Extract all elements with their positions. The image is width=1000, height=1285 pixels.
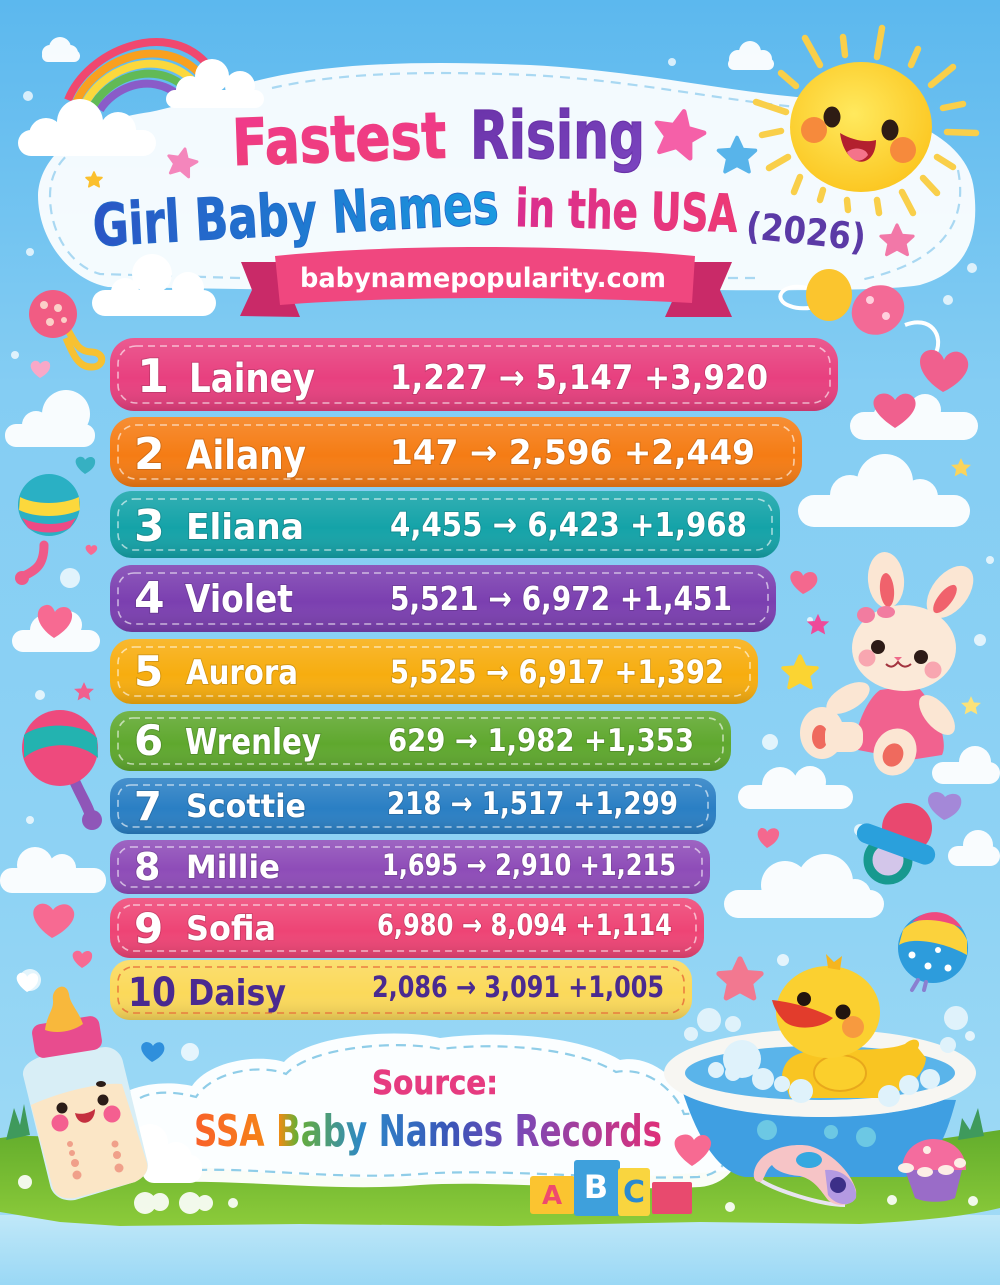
bubbles [684, 1006, 968, 1107]
icon: bunny [800, 551, 983, 783]
row 9: 6,980 → 8,094 +1,114 [377, 908, 672, 942]
icon: cupcake [898, 1139, 966, 1202]
cloud: right mid [798, 454, 970, 527]
row 7: 218 → 1,517 +1,299 [387, 786, 678, 822]
grass [0, 1130, 1000, 1226]
title [91, 97, 868, 260]
duck cheek [842, 1016, 864, 1038]
icon: bathtub with duck [664, 954, 976, 1177]
cloud: rainbow right [166, 59, 264, 108]
icon: right star [881, 225, 913, 255]
duck beak [772, 1000, 833, 1028]
title year: (2026) [744, 204, 868, 259]
row 4: 4 [134, 573, 165, 624]
row 6: 6 [134, 716, 163, 765]
row 5 [110, 639, 758, 704]
row 8: 8 [134, 845, 160, 889]
cloud: right lower 1 [738, 766, 853, 809]
row 3: 4,455 → 6,423 +1,968 [390, 505, 747, 544]
cloud: left small [12, 611, 100, 652]
row 2 [110, 417, 802, 487]
banner ribbon [240, 247, 732, 317]
row 3: 3 [134, 501, 165, 552]
icon: rattle left lower [22, 710, 102, 830]
icon: small hearts [76, 457, 817, 1062]
row 5: 5 [134, 647, 163, 696]
duck eyes [797, 992, 850, 1020]
icon: white heart [17, 973, 38, 992]
row 6: Wrenley [185, 722, 321, 763]
duck crest [826, 954, 842, 970]
row 1: 1 [137, 349, 169, 403]
icon: rainbow [68, 42, 205, 110]
bottom haze [0, 1215, 1000, 1285]
cloud: rainbow left [18, 99, 156, 156]
banner text: babynamepopularity.com [300, 263, 666, 294]
icon: ABC blocks [530, 1160, 692, 1216]
cloud: far right [932, 746, 1000, 784]
row 7 [110, 778, 716, 834]
tub front rim [664, 1073, 976, 1117]
title cloud panel [38, 63, 975, 290]
grass tufts [6, 1104, 984, 1140]
icon: star left [76, 684, 92, 699]
ranking rows [110, 338, 838, 1020]
icon: small pink star [165, 146, 199, 178]
duck body [782, 1040, 926, 1098]
row 4: Violet [185, 577, 293, 621]
row 10: Daisy [188, 973, 286, 1014]
row 6 [110, 711, 731, 771]
icon: light heart top left [31, 361, 50, 378]
icon: safety pin [754, 1145, 856, 1205]
source label: Source: [372, 1063, 498, 1102]
row 1: 1,227 → 5,147 +3,920 [390, 358, 768, 398]
icon: pink rattle top left [29, 290, 102, 367]
icon: purple heart [928, 792, 961, 820]
bottle body [23, 1047, 148, 1200]
title word: Fastest: Fastest [231, 100, 447, 181]
row 1: Lainey [189, 356, 315, 402]
icon: sun [756, 28, 976, 213]
tub water [685, 1046, 955, 1100]
cloud: top right small [728, 41, 774, 70]
duck wing [814, 1055, 866, 1091]
row 4: 5,521 → 6,972 +1,451 [390, 579, 732, 618]
block letters: A [542, 1181, 562, 1211]
tub rim [664, 1029, 976, 1117]
row 2: 2 [134, 429, 165, 480]
title line 2 names: Girl Baby Names [91, 169, 500, 260]
row 4 [110, 565, 776, 632]
icon: yellow star right [783, 656, 817, 687]
icon: small star yellow [963, 698, 979, 713]
icon: star far right [953, 460, 969, 475]
icon: baby bottle [23, 987, 148, 1200]
icon: blue star [719, 138, 755, 172]
icon: small star pink [809, 616, 827, 633]
row 7: 7 [134, 784, 162, 830]
cloud: right upper [850, 394, 978, 440]
source name: SSA Baby Names Records [194, 1106, 662, 1157]
row 8 [110, 840, 710, 894]
icon: pink star [651, 107, 707, 160]
icon: small yellow star [86, 172, 102, 187]
row 9: 9 [134, 904, 163, 953]
row 8: 1,695 → 2,910 +1,215 [382, 848, 676, 882]
source cloud [130, 1033, 743, 1188]
icon: hearts left [33, 545, 711, 1166]
duck head [776, 966, 880, 1058]
cloud: left lower [0, 847, 106, 893]
row 3: Eliana [186, 507, 304, 548]
row 2: Ailany [186, 433, 306, 479]
cloud: left mid [5, 390, 95, 447]
icon: heart right small [873, 394, 916, 428]
title word: Rising: Rising [470, 97, 645, 174]
row 5: Aurora [186, 653, 298, 693]
small cloud left of source [132, 1124, 202, 1183]
row 10: 10 [128, 970, 176, 1016]
icon: right ball [898, 912, 968, 990]
row 2: 147 → 2,596 +2,449 [390, 433, 755, 473]
row 9 [110, 898, 704, 958]
icon: striped rattle left [15, 474, 80, 585]
bottle face [52, 1081, 124, 1180]
bottle collar [31, 1015, 103, 1059]
row 10: 2,086 → 3,091 +1,005 [372, 970, 664, 1004]
icon: ABC blocks: B [584, 1168, 608, 1206]
tub hearts [757, 1120, 876, 1147]
icon: ABC blocks: C [623, 1175, 645, 1210]
row 10 [110, 960, 692, 1020]
flowers on grass [18, 1175, 978, 1214]
cloud: top left small [42, 37, 80, 62]
icon: balls and toy top right [780, 269, 938, 355]
row 3 [110, 491, 780, 558]
row 8: Millie [186, 848, 280, 886]
row 5: 5,525 → 6,917 +1,392 [390, 653, 724, 691]
decorative clouds [0, 37, 1000, 918]
row 7: Scottie [186, 787, 306, 825]
icon: pacifier [854, 803, 938, 880]
tub body [683, 1093, 956, 1177]
cloud: right lower 2 [724, 854, 884, 918]
stars [86, 107, 913, 255]
row 6: 629 → 1,982 +1,353 [388, 723, 694, 759]
row 9: Sofia [186, 909, 276, 949]
row 1 [110, 338, 838, 411]
bottle milk [31, 1084, 147, 1198]
cloud: below title [92, 254, 216, 316]
title line 2 suffix: in the USA [515, 179, 738, 245]
cloud: far right 2 [948, 830, 1000, 866]
icon: flower star [719, 959, 761, 998]
bottle teat [45, 987, 83, 1032]
icon: heart right upper [920, 350, 968, 392]
